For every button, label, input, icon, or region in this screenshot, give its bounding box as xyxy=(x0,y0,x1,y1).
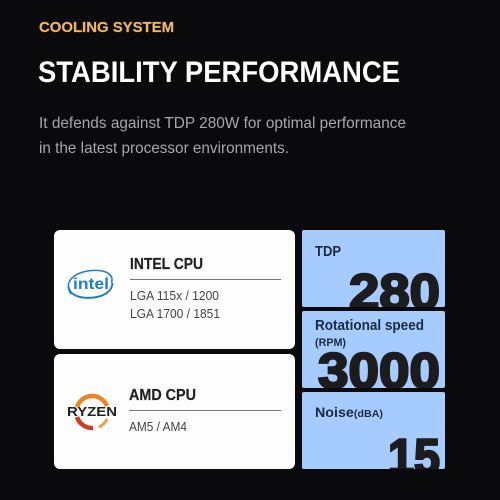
description text xyxy=(39,115,406,157)
label: rotational speed: Rotational speed xyxy=(315,318,424,334)
description text: in the latest processor environments. xyxy=(39,140,289,157)
panel: rotational speed xyxy=(302,311,445,388)
value: 280: 280 xyxy=(349,264,440,320)
panel: amd cpu xyxy=(54,354,295,469)
intel sockets xyxy=(130,289,220,321)
value: 15: 15 xyxy=(388,429,440,485)
panel: intel cpu xyxy=(54,230,295,349)
label: rpm: (RPM) xyxy=(315,337,346,349)
icon: intel logo: intel xyxy=(73,276,109,293)
value: 3000: 3000 xyxy=(318,343,440,399)
intel sockets: LGA 115x / 1200 xyxy=(130,289,219,303)
panel: tdp xyxy=(302,230,445,307)
icon: ryzen logo: RYZEN xyxy=(67,404,117,419)
description text: It defends against TDP 280W for optimal performance xyxy=(39,115,406,132)
icon: intel logo xyxy=(68,270,112,298)
label: noise: Noise(dBA) xyxy=(315,404,383,420)
heading: intel cpu: INTEL CPU xyxy=(130,256,203,273)
icon: ryzen logo xyxy=(67,396,117,428)
label: tdp: TDP xyxy=(315,244,341,260)
intel sockets: LGA 1700 / 1851 xyxy=(130,307,220,321)
panel: noise xyxy=(302,392,445,469)
amd sockets: AM5 / AM4 xyxy=(129,420,187,434)
eyebrow: cooling system: COOLING SYSTEM xyxy=(39,19,174,36)
heading: amd cpu: AMD CPU xyxy=(129,387,196,404)
title: STABILITY PERFORMANCE xyxy=(38,56,400,89)
